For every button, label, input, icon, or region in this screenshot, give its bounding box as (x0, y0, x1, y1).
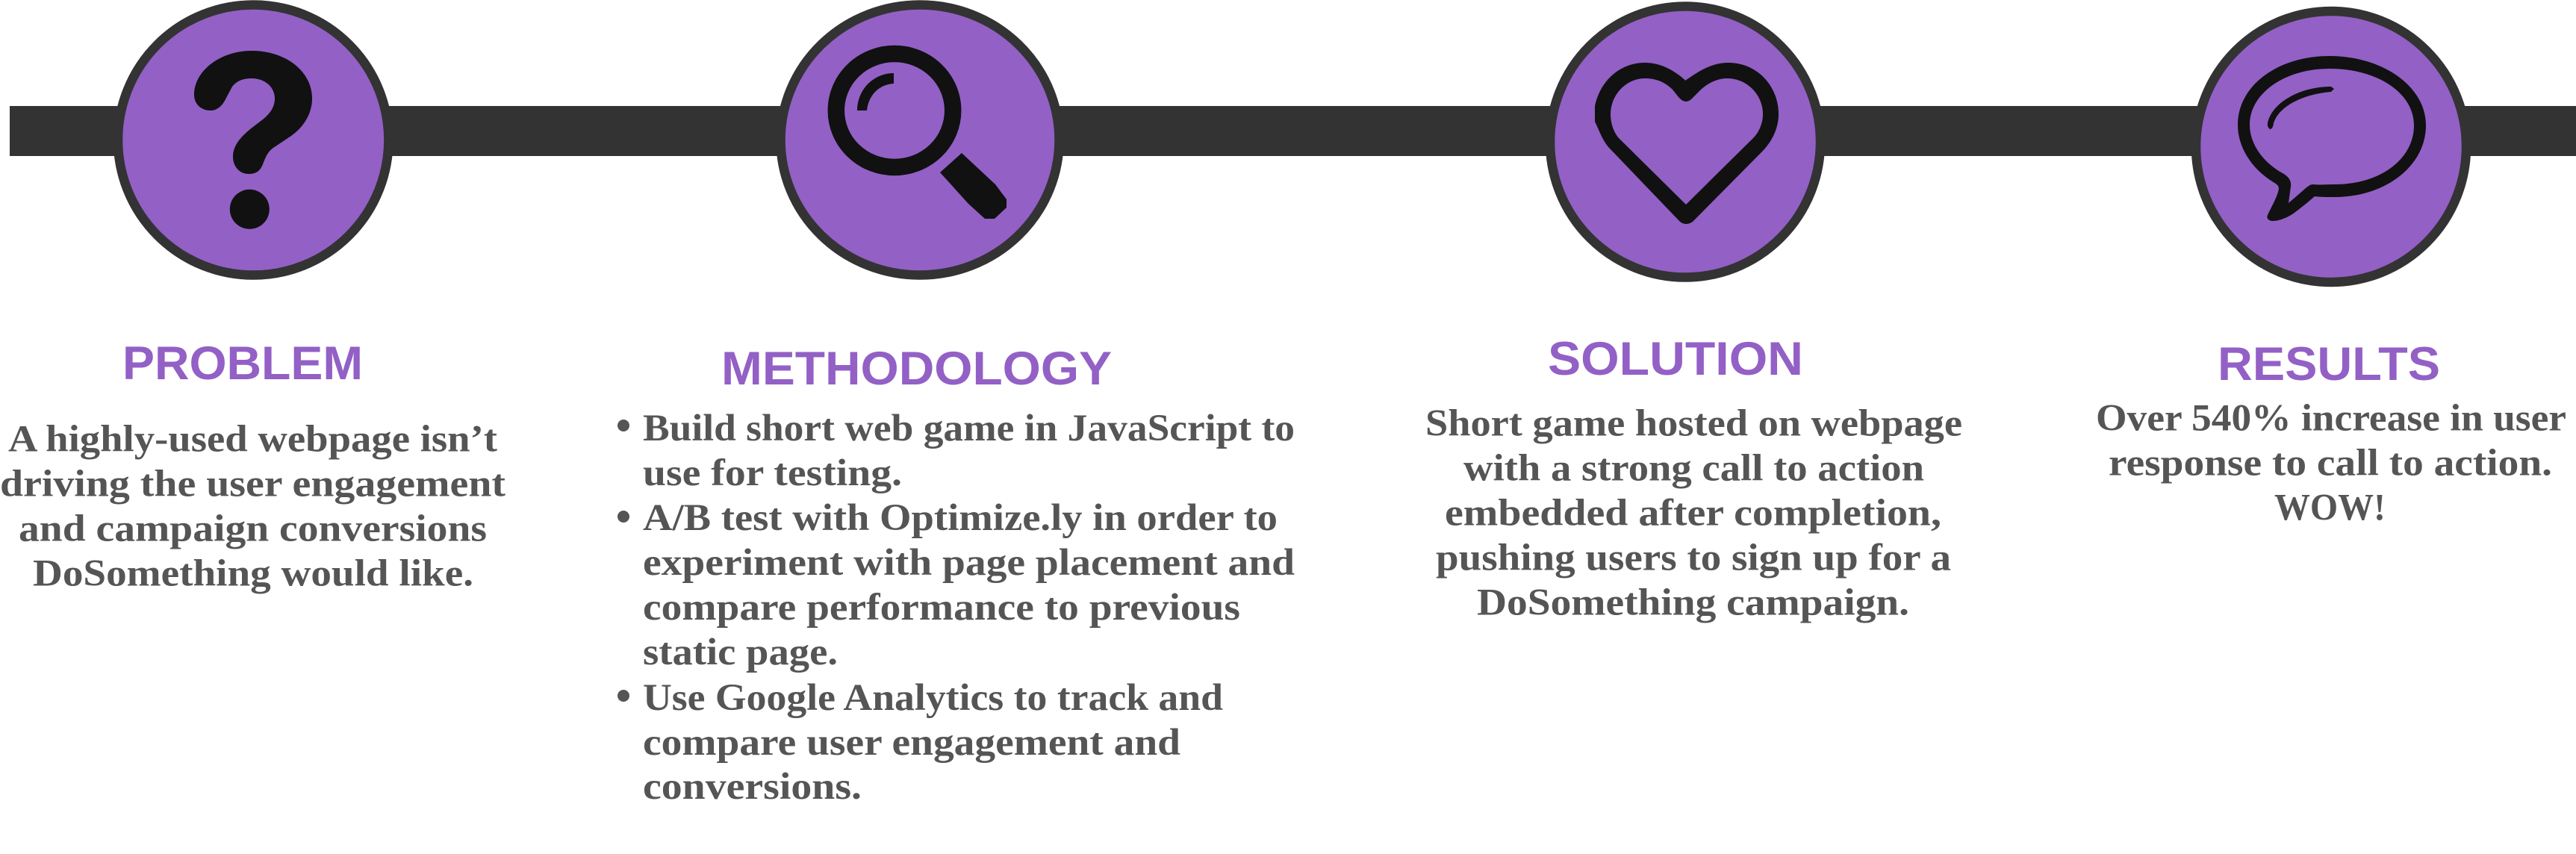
text: solution description (1425, 403, 1962, 624)
text: problem description (0, 418, 505, 594)
heading: results: RESULTS (2218, 338, 2440, 390)
step: solution (1425, 6, 1962, 624)
list: methodology bullets: experiment with page placement and (643, 542, 1295, 584)
circle: solution (1550, 6, 1820, 278)
step: problem (0, 4, 505, 594)
text: results description: WOW! (2274, 487, 2386, 529)
step: results (2096, 11, 2566, 529)
list: methodology bullets: use for testing. (643, 452, 902, 494)
text: solution description: Short game hosted on webpage (1425, 403, 1962, 445)
timeline bar (10, 106, 2576, 156)
icon: speech bubble (2238, 56, 2426, 221)
text: results description: response to call to action. (2109, 442, 2552, 484)
text: solution description: pushing users to sign up for a (1436, 537, 1951, 579)
text: results description: Over 540% increase in user (2096, 397, 2566, 439)
list: methodology bullets: Use Google Analytics to track and (643, 677, 1223, 719)
text: problem description: DoSomething would like. (33, 552, 473, 594)
list: methodology bullets (617, 408, 1295, 808)
list: methodology bullets: Build short web game in JavaScript to (643, 408, 1295, 449)
icon: heart (1595, 63, 1779, 224)
list: methodology bullets: A/B test with Optimize.ly in order to (643, 497, 1278, 539)
icon: magnifying glass (836, 54, 1007, 219)
text: problem description: driving the user engagement (0, 463, 505, 505)
circle: problem (118, 4, 388, 275)
icon: question mark (194, 51, 312, 229)
circle: methodology (781, 4, 1059, 275)
text: results description (2096, 397, 2566, 529)
heading: problem: PROBLEM (122, 337, 363, 390)
heading: methodology: METHODOLOGY (721, 343, 1112, 395)
text: solution description: with a strong call to action (1463, 448, 1924, 490)
list: methodology bullets: static page. (643, 632, 838, 673)
text: problem description: and campaign conversions (19, 508, 487, 549)
list: methodology bullets: conversions. (643, 766, 862, 808)
text: problem description: A highly-used webpage isn’t (8, 418, 497, 460)
text: solution description: embedded after completion, (1445, 493, 1941, 534)
heading: solution: SOLUTION (1548, 333, 1803, 385)
list: methodology bullets: compare performance to previous (643, 587, 1240, 629)
list: methodology bullets: compare user engagement and (643, 722, 1180, 764)
circle: results (2196, 11, 2466, 282)
text: solution description: DoSomething campaign. (1477, 582, 1909, 624)
step: methodology (617, 4, 1295, 808)
